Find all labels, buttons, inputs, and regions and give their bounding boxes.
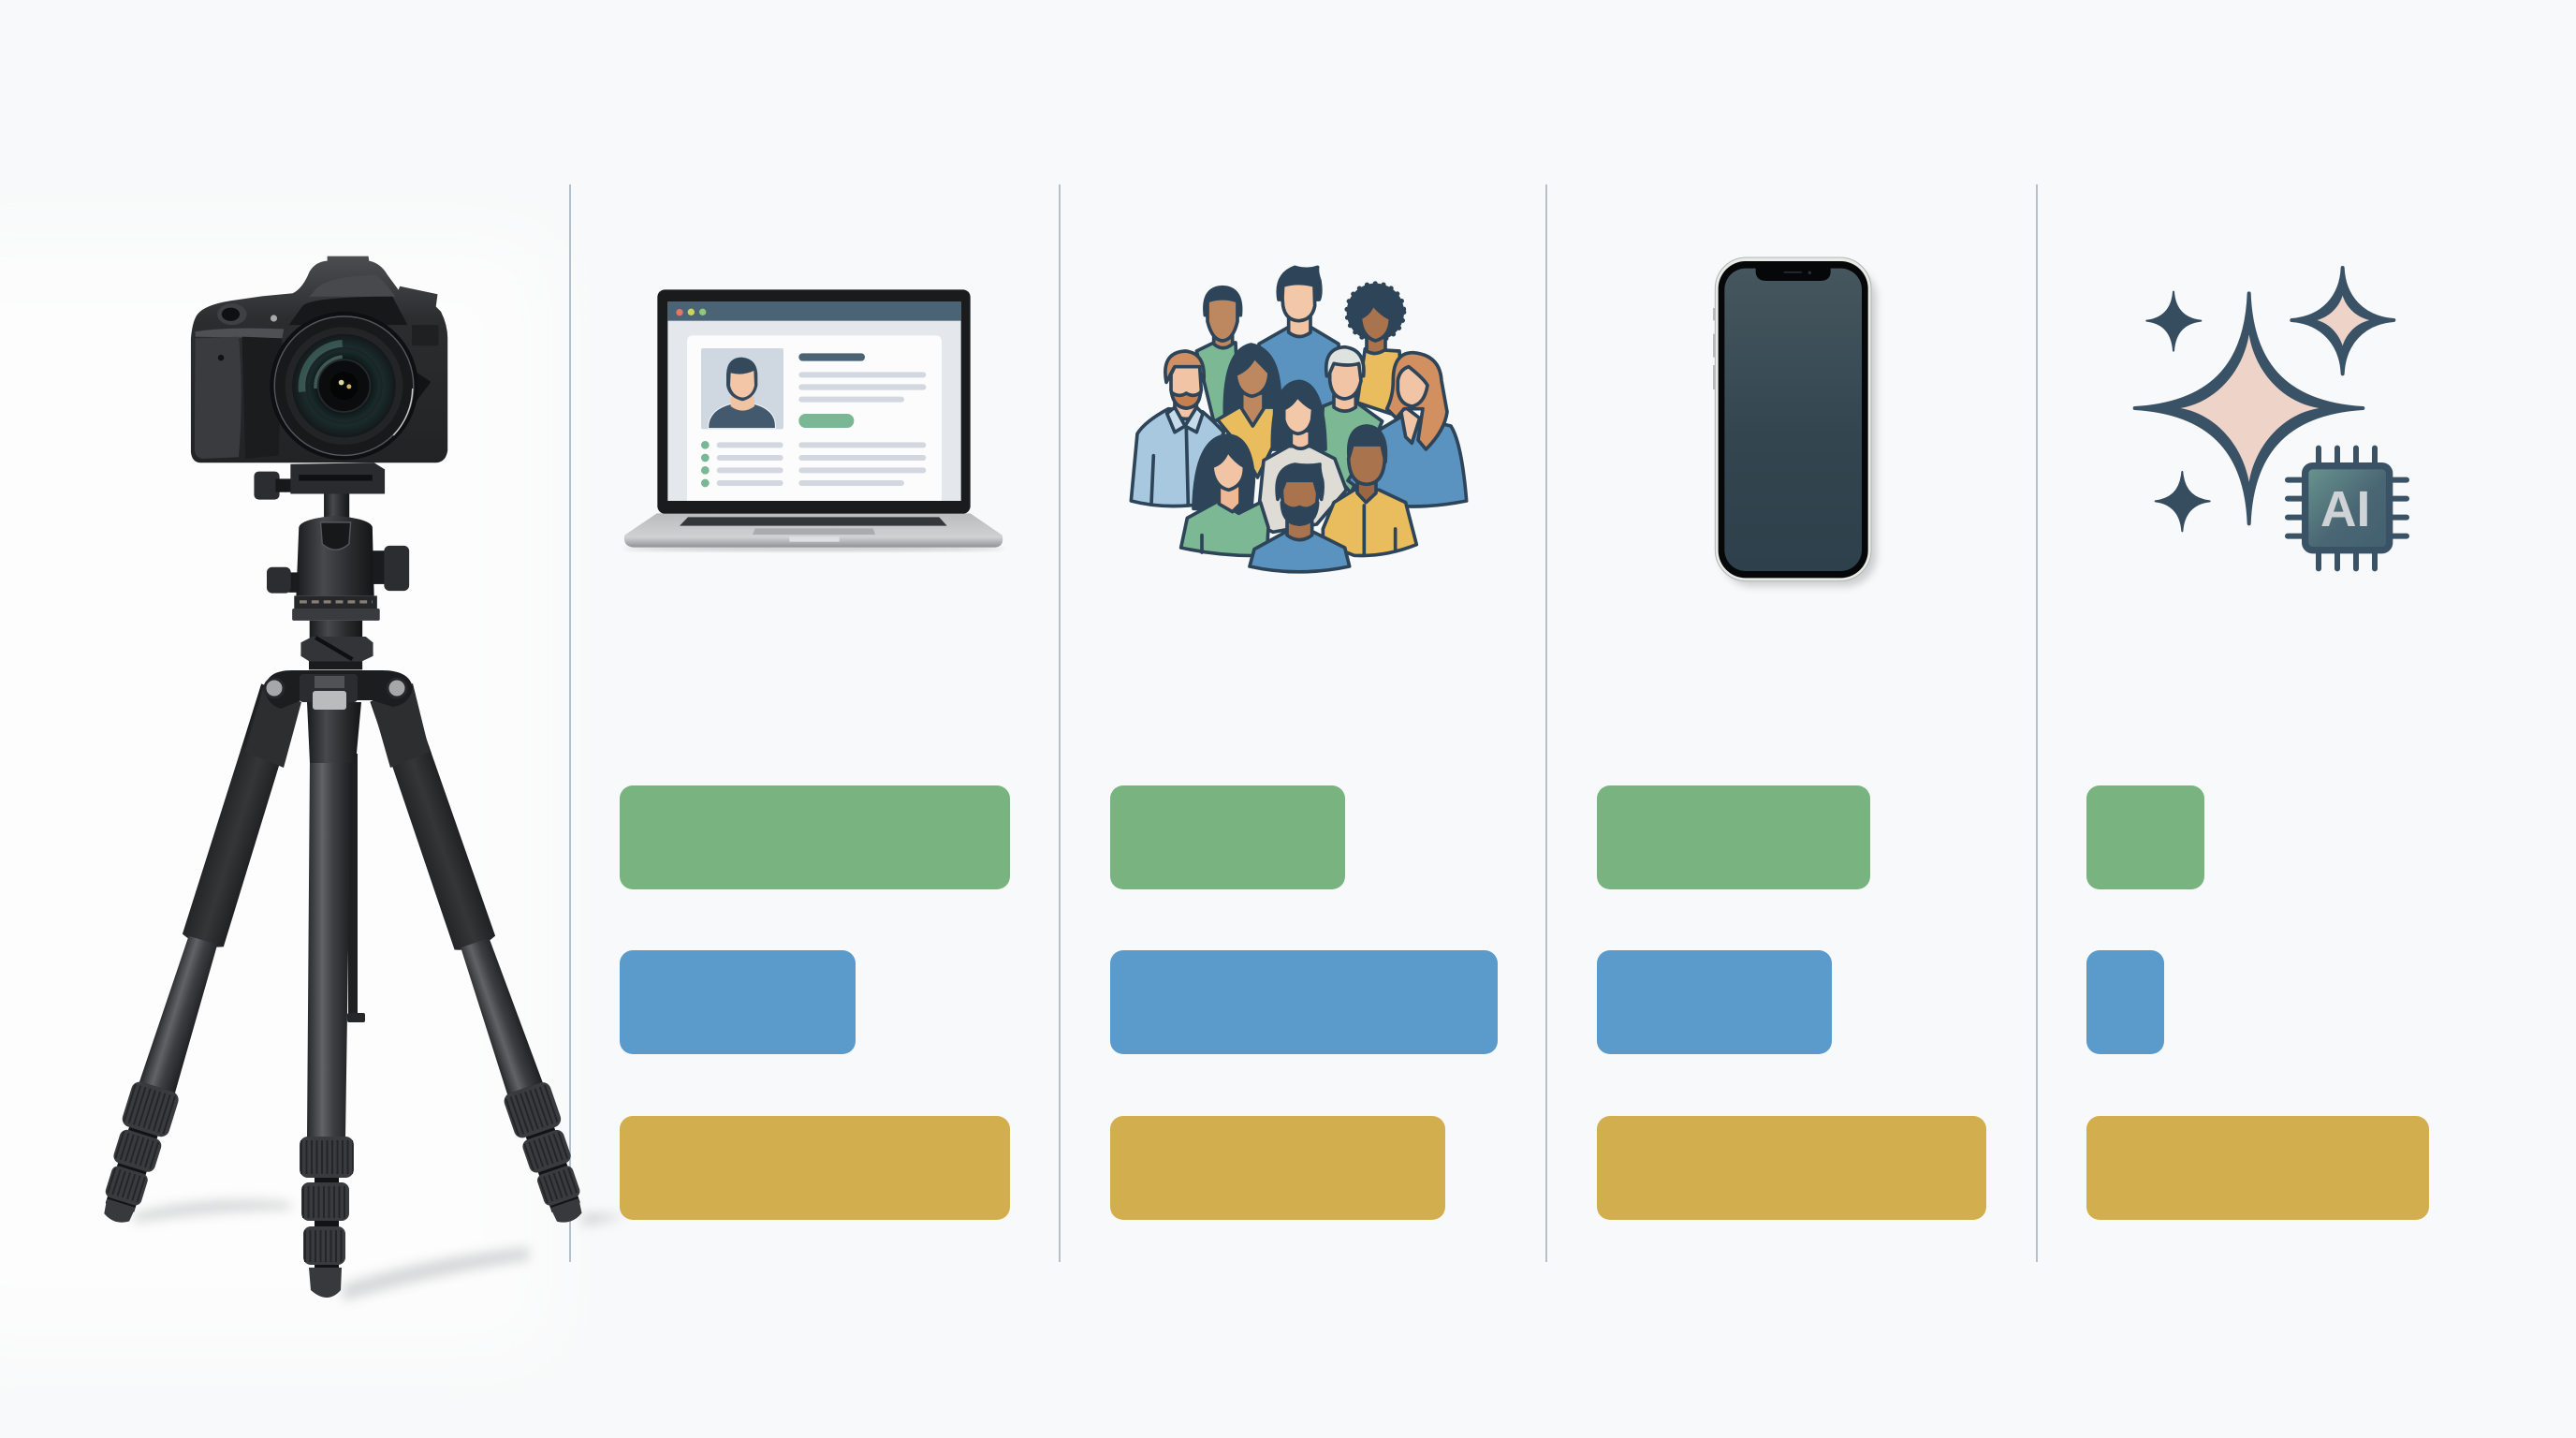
tripod center leg: [300, 759, 354, 1298]
person: back right, yellow top, afro: [1347, 284, 1404, 418]
person: front center man, blue shirt, beard: [1250, 464, 1350, 572]
person: back center, blue shirt: [1259, 267, 1341, 409]
tripod right leg: [367, 687, 593, 1229]
person: red haired woman, blue shirt: [1348, 353, 1467, 506]
medium sparkle top right: [2291, 268, 2393, 374]
person: back left, green shirt: [1196, 287, 1241, 421]
small sparkle top left: [2146, 292, 2201, 351]
green bar: [1597, 785, 1870, 889]
blue bar: [2086, 950, 2164, 1054]
person: dark haired woman, yellow top: [1218, 345, 1280, 477]
green bar: [620, 785, 1010, 889]
column divider 1: [569, 184, 571, 1262]
phone notch: [1756, 266, 1831, 281]
laptop screen bezel: [657, 289, 971, 514]
bar chart: column 1: [620, 785, 1010, 1220]
bar chart: column 4: [2086, 785, 2429, 1220]
camera body: [191, 257, 447, 462]
bar chart: column 2: [1110, 785, 1498, 1220]
yellow bar: [1110, 1116, 1445, 1220]
person: front left woman, green shirt: [1181, 435, 1268, 556]
green bar: [1110, 785, 1345, 889]
icon: group of diverse people: [1131, 267, 1467, 572]
icon: smartphone: [1713, 257, 1877, 587]
yellow bar: [1597, 1116, 1986, 1220]
phone side buttons: [1713, 308, 1716, 389]
AI chip: [2288, 448, 2407, 568]
laptop shadow: [623, 546, 1004, 551]
profile photo: [701, 348, 783, 429]
person: gray haired man, green shirt: [1320, 347, 1383, 493]
camera lens: [270, 312, 418, 460]
person: center woman, white top: [1257, 381, 1346, 532]
profile text lines: [798, 353, 926, 486]
ball head: [267, 492, 409, 669]
phone frame: [1715, 257, 1871, 581]
tripod floor shadows: [134, 1200, 625, 1301]
profile checklist: [701, 441, 783, 487]
yellow bar: [2086, 1116, 2429, 1220]
laptop screen page: [667, 301, 961, 501]
person: left man, light blue shirt, beard: [1131, 351, 1223, 506]
blue bar: [1110, 950, 1498, 1054]
camera and ball head: [191, 257, 447, 669]
bar chart: column 3: [1597, 785, 1986, 1220]
column divider 4: [2036, 184, 2038, 1262]
column divider 2: [1059, 184, 1061, 1262]
photo: camera on tripod: [93, 257, 625, 1301]
tripod spider: [245, 670, 430, 768]
icon: AI sparkles and chip: [2135, 268, 2407, 568]
tripod center rod: [347, 754, 365, 1022]
quick release plate: [254, 462, 385, 500]
icon: laptop with profile page: [623, 289, 1004, 551]
column divider 3: [1545, 184, 1547, 1262]
phone shadow: [1720, 267, 1877, 587]
small sparkle bottom left: [2156, 472, 2210, 531]
photo backdrop behind tripod: [0, 243, 543, 1348]
AI chip: AI: [2320, 482, 2370, 537]
yellow bar: [620, 1116, 1010, 1220]
blue bar: [1597, 950, 1832, 1054]
large sparkle: [2135, 293, 2363, 523]
blue bar: [620, 950, 856, 1054]
green bar: [2086, 785, 2204, 889]
laptop base: [624, 513, 1003, 548]
phone bezel: [1719, 261, 1868, 578]
person: front right man, yellow shirt: [1323, 426, 1416, 556]
phone screen: [1724, 269, 1862, 571]
tripod left leg: [93, 682, 304, 1228]
